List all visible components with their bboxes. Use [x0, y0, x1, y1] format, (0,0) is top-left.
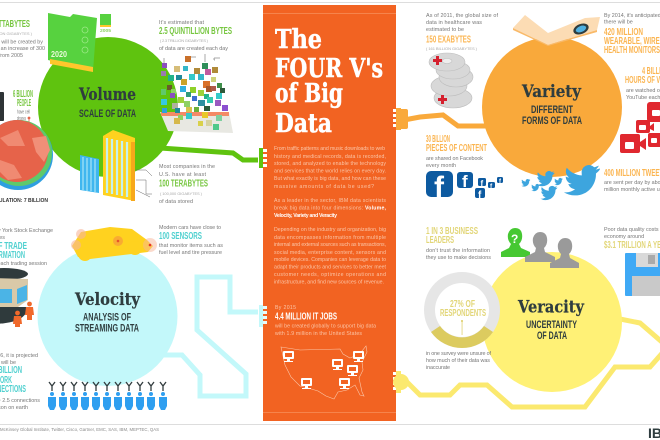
text: 2.5 quintillion bytes: of data are created each day [159, 46, 228, 52]
title: The [275, 25, 322, 55]
text: IT jobs: will be created globally to support big data [275, 324, 376, 330]
text: 100 terabytes: 100 TERABYTES [159, 178, 208, 190]
icon: stacked discs [429, 53, 473, 108]
text: IT jobs: 4.4 MILLION IT JOBS [275, 312, 337, 322]
chart: donut 27%: RESPONDENTS [440, 308, 486, 319]
text: 30 billion pieces: PIECES OF CONTENT [426, 143, 487, 154]
text: 1 in 3 leaders: LEADERS [426, 235, 454, 246]
text: IT jobs: By 2015 [275, 305, 296, 311]
text: 2.5 quintillion bytes [159, 20, 232, 52]
text: 4 billion hours [625, 66, 660, 101]
heading: velocity: STREAMING DATA [75, 322, 139, 334]
text: 2.5 quintillion bytes: 2.5 QUINTILLION BYTES [159, 26, 232, 37]
heading: veracity: Veracity [517, 298, 585, 318]
intro text: massive amounts of data be used? [274, 184, 374, 190]
icon: globe [0, 117, 53, 190]
heading: velocity: Velocity [74, 290, 141, 310]
panel: volume [0, 13, 258, 205]
title [275, 25, 383, 139]
heading: variety: FORMS OF DATA [522, 115, 582, 127]
body paragraph: Depending on the industry and organization, big [274, 227, 386, 233]
velocity circle [38, 246, 178, 386]
text: 420 million [604, 13, 660, 56]
text: survey: inaccurate [426, 365, 450, 371]
veracity circle [482, 252, 622, 392]
icons: facebook: f [462, 172, 468, 191]
IBM paragraph [274, 198, 387, 219]
connector: volume to centre [160, 148, 258, 160]
text: 100 sensors: 100 SENSORS [159, 231, 202, 242]
icon: car with sensors [71, 227, 157, 261]
text: survey: how much of their data was [426, 358, 490, 364]
body paragraph: data encompasses information from multiple [274, 235, 386, 241]
connector tab: veracity [393, 371, 401, 393]
connector: veracity to centre [393, 318, 660, 407]
text: IT jobs [275, 305, 376, 337]
body paragraph: adapt their products and services to better meet [274, 264, 387, 270]
text: 1 in 3 leaders [426, 226, 491, 261]
text: trade information [0, 228, 53, 267]
text: 100 terabytes: Most companies in the [159, 164, 215, 170]
orange background [263, 5, 396, 421]
icon: people heads [501, 228, 579, 268]
chart: donut 27% [424, 272, 500, 348]
text: network connections [0, 353, 40, 411]
panel: variety [399, 13, 660, 204]
text: 1 in 3 leaders: don't trust the information [426, 248, 490, 254]
text: 420 million: By 2014, it's anticipated [604, 13, 660, 19]
volume circle [38, 37, 178, 177]
body paragraph: customer needs, optimize operations and [274, 272, 386, 278]
text: 100 terabytes: of data stored [159, 199, 193, 205]
icon: floppy disk [625, 253, 660, 296]
IBM paragraph: As a leader in the sector, IBM data scientists [274, 198, 386, 204]
connector tab: variety [393, 108, 401, 130]
map: USA with monitors [281, 346, 367, 399]
text: 6 billion people: phones [17, 116, 26, 122]
text: 150 exabytes: data in healthcare was [426, 20, 482, 26]
icon: skyscrapers [80, 130, 135, 201]
text: 150 exabytes: estimated to be [426, 27, 464, 33]
text: survey: in one survey were unsure of [426, 351, 492, 357]
heading: veracity: UNCERTAINTY [526, 319, 577, 331]
icons: facebook: f [499, 179, 502, 185]
text: 100 sensors [159, 225, 223, 256]
text: 420 million: there will be [604, 20, 633, 26]
text: 100 terabytes: ( 100,000 GIGABYTES ) [160, 191, 203, 196]
icon: 2005 data card [100, 14, 112, 33]
text: 2.5 quintillion bytes: It's estimated that [159, 20, 204, 26]
text: 1 in 3 leaders: they use to make decisions [426, 255, 491, 261]
body paragraph: infrastructure, and find new sources of revenue. [274, 280, 384, 286]
text: 100 terabytes [159, 164, 215, 205]
connector tab: volume [259, 148, 267, 168]
heading: velocity [74, 290, 141, 334]
heading: variety: Variety [521, 82, 582, 102]
text: 100 sensors: Modern cars have close to [159, 225, 221, 231]
panel: centre column [259, 5, 401, 421]
icon: people heads: ? [511, 232, 518, 246]
heading: variety [521, 82, 582, 127]
text: survey [426, 351, 492, 371]
text: 6 billion people: have cell [17, 110, 30, 116]
connector: variety to centre [399, 109, 490, 129]
IBM paragraph: Velocity, Variety and Veracity [274, 213, 337, 219]
sources footer: McKinsey Global Institute, Twitter, Cisco, Gartner, EMC, SAS, IBM, MEPTEC, QAS [0, 427, 159, 432]
chart: donut 27%: 27% OF [450, 299, 475, 310]
panel: veracity [393, 226, 660, 440]
text: 30 billion pieces: are shared on Facebook [426, 156, 483, 162]
network lines from buildings [136, 170, 152, 197]
body paragraph: mobile devices. Companies can leverage data to [274, 257, 386, 263]
heading: velocity: ANALYSIS OF [83, 312, 131, 324]
heading: variety: DIFFERENT [531, 104, 573, 116]
icon: 2020 data card: 2020 [51, 50, 67, 59]
icon: 2020 data card [48, 13, 97, 72]
heading: volume: Volume [78, 85, 136, 105]
icons: twitter birds [521, 165, 600, 200]
intro text: stored, and analyzed to enable the technology [274, 161, 386, 167]
intro text: But what exactly is big data, and how can these [274, 176, 386, 182]
panel: velocity [0, 225, 258, 411]
variety circle [482, 37, 622, 177]
icons: people with antennas [48, 382, 167, 410]
text: 100 sensors: fuel level and tire pressure [159, 250, 222, 256]
text: 30 billion pieces: every month [426, 163, 456, 169]
text: 40 zettabytes [0, 19, 45, 59]
intro text [274, 146, 386, 190]
heading: veracity: OF DATA [537, 330, 567, 342]
icons: facebook [426, 171, 503, 204]
text: 150 exabytes: 150 EXABYTES [426, 34, 471, 46]
text: 2.5 quintillion bytes: ( 2.3 TRILLION GIGABYTES ) [160, 38, 209, 43]
icon: phone [0, 92, 4, 121]
text: 100 sensors: that monitor items such as [159, 243, 223, 249]
text: 30 billion pieces: 30 BILLION [426, 134, 450, 145]
panel: volume: 6 BILLION [13, 89, 33, 100]
chart: data cubes on platform [160, 54, 233, 133]
intro text: From traffic patterns and music downloads to web [274, 146, 385, 152]
text: 30 billion pieces [426, 134, 487, 169]
text: 100 terabytes: U.S. have at least [159, 172, 206, 178]
text: 150 exabytes [426, 13, 498, 51]
connector tab: velocity [259, 305, 267, 327]
icons: facebook: f [434, 171, 445, 204]
panel: volume: PEOPLE [17, 98, 31, 109]
icon: stock exchange building [0, 268, 28, 324]
IBM paragraph: break big data into four dimensions: Volume, [274, 206, 387, 212]
title: of Big [275, 79, 343, 109]
title: Data [275, 109, 332, 139]
icons: youtube cameras [620, 102, 660, 153]
text: 3.1 trillion [604, 227, 660, 251]
text: IT jobs: with 1.9 million in the United States [275, 331, 362, 337]
icons: facebook: f [478, 190, 482, 201]
icon: arm with wearable [513, 15, 600, 46]
icons: facebook: f [490, 183, 493, 190]
intro text: and services that the world relies on every day. [274, 168, 386, 174]
icon: 2005 data card: 2005 [100, 28, 112, 33]
icons: facebook: f [480, 179, 484, 188]
heading: volume [78, 85, 136, 120]
text: 400 million tweets [604, 168, 660, 193]
text: 3.1 trillion: economy around [604, 234, 644, 240]
text: 150 exabytes: As of 2011, the global size of [426, 13, 498, 19]
text: 150 exabytes: ( 161 BILLION GIGABYTES ) [426, 46, 478, 51]
intro text: history and medical records, data is recorded, [274, 154, 386, 160]
connector: velocity to centre [160, 277, 258, 396]
title: FOUR V's [275, 54, 383, 84]
body paragraph: social media, enterprise content, sensors and [274, 250, 386, 256]
text: 1 in 3 leaders: 1 IN 3 BUSINESS [426, 226, 478, 237]
body paragraph: internal and external sources such as transactions, [274, 242, 386, 248]
heading: veracity [517, 298, 585, 342]
icons: orange people [13, 302, 34, 327]
heading: volume: SCALE OF DATA [79, 108, 136, 120]
text: 6 billion people [13, 89, 33, 122]
body paragraph [274, 227, 387, 286]
